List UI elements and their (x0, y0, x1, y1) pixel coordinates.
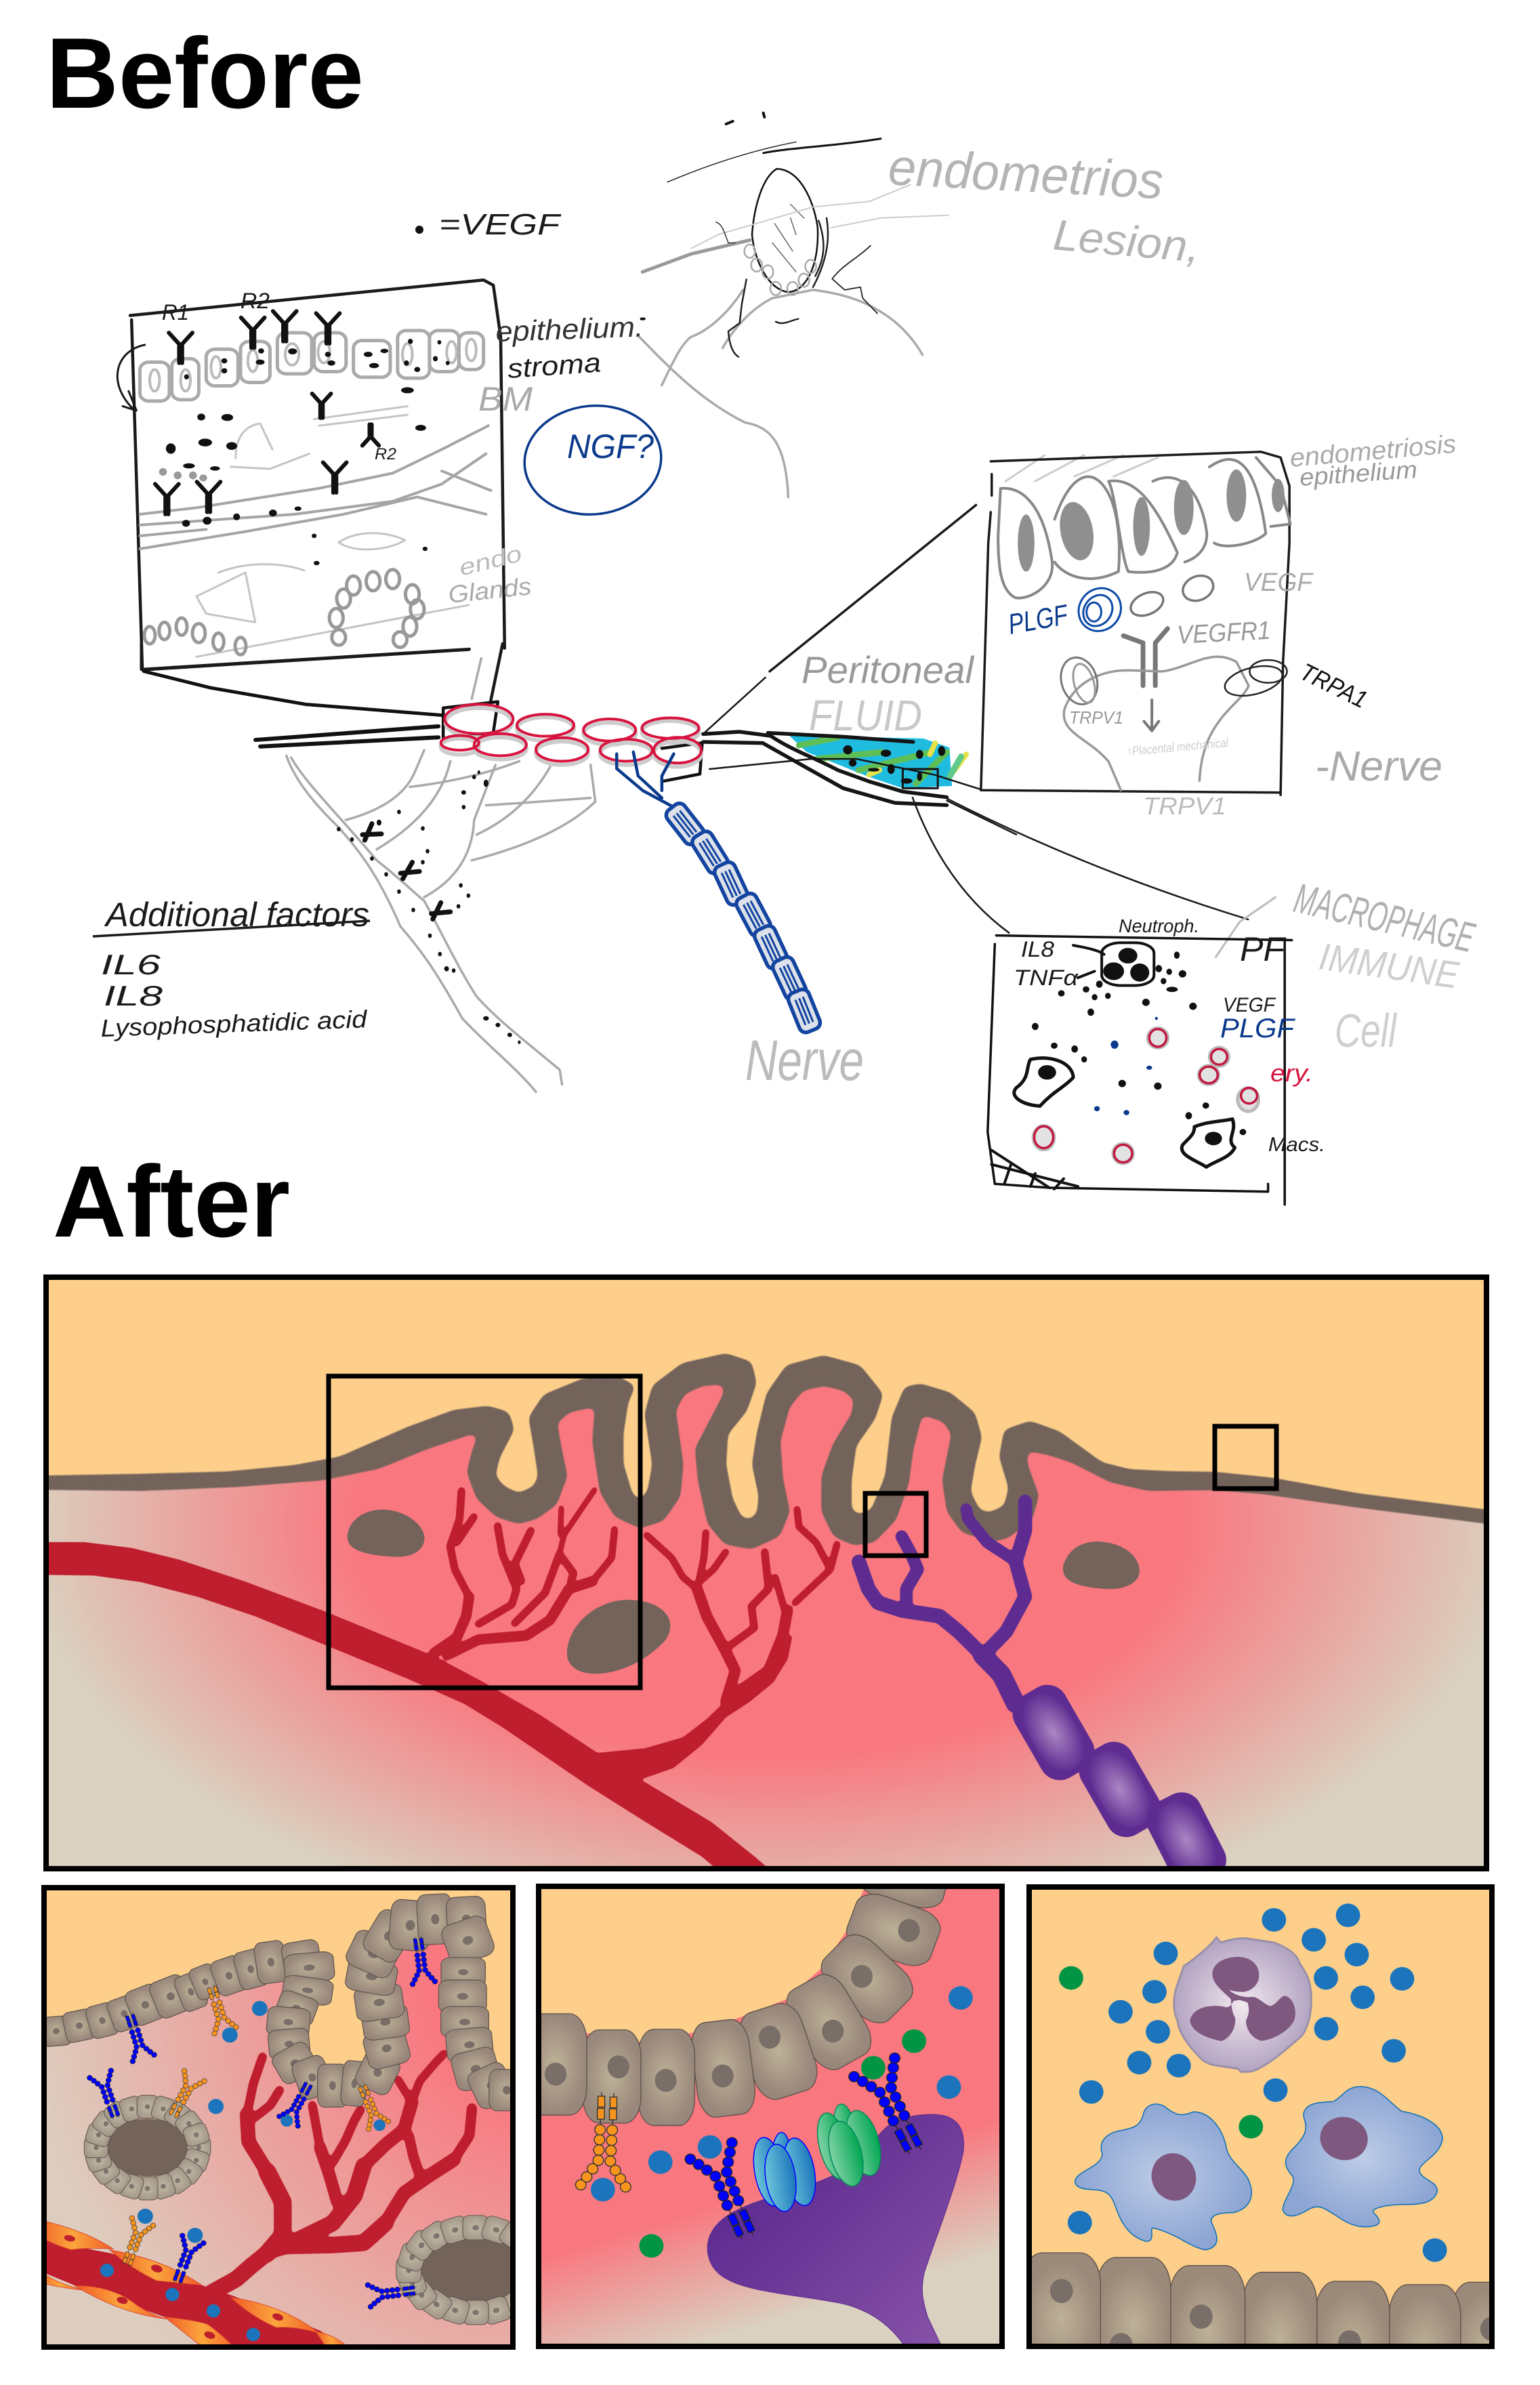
nerve ending (707, 2115, 963, 2353)
labels: macrophage immune cell: IMMUNE (1316, 934, 1462, 997)
inset labels: epithelium (1299, 455, 1418, 491)
panel frame (539, 1886, 1002, 2346)
blood vessel and capillary trees (8, 1490, 837, 1877)
inset labels: ery. (1270, 1059, 1313, 1087)
fluid background (534, 1882, 867, 2041)
fluid background (47, 1890, 510, 2069)
panel: peritoneal fluid immune cells (1022, 1884, 1523, 2385)
inset labels: -Nerve (1315, 743, 1442, 790)
macrophages (1075, 2086, 1442, 2249)
inset labels: R2 (375, 445, 396, 463)
inset labels (1014, 915, 1325, 1156)
zoom boxes (329, 1376, 1276, 1688)
inset drawing (770, 452, 1291, 795)
panel frame (44, 1888, 513, 2347)
sketch: endometriosis lesion overview (638, 113, 949, 497)
list: additional factors: IL8 (104, 980, 163, 1012)
inset labels: TRPV1 (1069, 707, 1123, 728)
inset labels: VEGF (1223, 994, 1276, 1016)
nerve with branches (859, 1501, 1025, 1703)
heading: Before: Before (46, 18, 364, 129)
list: additional factors: Additional factors (104, 896, 369, 934)
labels: macrophage immune cell: Cell (1335, 1004, 1398, 1057)
VEGF dots (100, 2001, 386, 2341)
inset labels: Glands (447, 572, 533, 608)
neutrophil (1174, 1937, 1311, 2072)
inset: endometriosis epithelium and nerve (770, 430, 1457, 820)
label: VEGF key: =VEGF (439, 208, 562, 241)
VEGF and PlGF dots (591, 1986, 973, 2258)
inset labels (162, 289, 644, 608)
nerve sketch in blue (663, 801, 822, 1035)
inset labels: ↑Placental mechanical (1127, 736, 1230, 758)
panel: main tissue overview (43, 1274, 1489, 1871)
inset labels: IL8 (1021, 937, 1054, 961)
main panel frame (46, 1277, 1486, 1869)
tissue gradient (534, 1882, 1010, 2353)
panel: epithelium, glands and capillaries detail (41, 1885, 516, 2350)
gland: lower right (396, 2215, 510, 2325)
ion channel: blue (749, 2132, 820, 2214)
inset labels: PLGF (1220, 1014, 1296, 1043)
sketch: tissue cross-section with lesion and vessels (142, 644, 1016, 1092)
peritoneal fluid region (703, 678, 1016, 835)
inset labels: R2 (241, 289, 270, 313)
inset labels: BM (478, 380, 533, 418)
inset labels: stroma (507, 348, 602, 384)
inset labels: TRPV1 (1143, 792, 1226, 820)
inset labels: R1 (162, 300, 189, 325)
inset labels: TRPA1 (1295, 657, 1372, 713)
heading: After: After (53, 1144, 290, 1258)
label: nerve: Nerve (745, 1029, 864, 1092)
blood vessel with endothelial cells (47, 2221, 346, 2344)
label: endometriosis lesion (887, 138, 1202, 272)
inset: endometrium epithelium and stroma (117, 280, 644, 670)
receptors (575, 2049, 944, 2247)
inset: peritoneal fluid immune cells (745, 795, 1325, 1205)
nerve beads (1012, 1684, 1226, 1866)
inset labels: endo (457, 541, 524, 581)
epithelium cell chain (34, 1893, 524, 2111)
gland: left (84, 2095, 211, 2201)
labels: peritoneal fluid: FLUID (809, 691, 922, 740)
inset labels: PF (1240, 930, 1287, 968)
list: additional factors: Lysophosphatidic acid (100, 1005, 368, 1042)
inset labels: VEGFR1 (1176, 617, 1271, 650)
label: endometriosis lesion: Lesion, (1052, 210, 1202, 272)
connecting lines and peritoneum (142, 644, 703, 1092)
inset labels: TNFα (1014, 966, 1079, 990)
inset labels: Macs. (1268, 1134, 1325, 1156)
epithelial cells (525, 1838, 954, 2125)
inset labels: endometriosis (1289, 430, 1457, 473)
peritoneal fluid background (49, 1280, 1484, 1519)
labels: macrophage immune cell (1290, 875, 1479, 1057)
capillary tree (211, 2054, 472, 2293)
inset labels: Neutroph. (1119, 915, 1199, 936)
panel: nerve ending detail (525, 1838, 1010, 2353)
stroma tissue gradient (49, 1385, 1484, 1866)
callout: NGF?: NGF? (567, 428, 654, 465)
label: endometriosis lesion: endometrios (887, 138, 1165, 210)
panel frame (1029, 1887, 1492, 2346)
VEGF receptors (86, 1934, 438, 2310)
sketch: before drawing (93, 113, 1479, 1205)
VEGF and PlGF dots (1059, 1903, 1447, 2262)
labels: peritoneal fluid (802, 648, 975, 740)
labels: peritoneal fluid: Peritoneal (802, 648, 975, 691)
list: additional factors: IL6 (101, 949, 161, 980)
list: additional factors (93, 896, 370, 1042)
tissue gradient (47, 1944, 510, 2344)
ion channel: green (812, 2102, 887, 2190)
callout: NGF? (519, 399, 667, 521)
inset labels: PLGF (1005, 598, 1071, 640)
inset drawing (745, 795, 1292, 1205)
inset labels (1005, 430, 1457, 820)
epithelium band (8, 1356, 1540, 1547)
inset labels: VEGF (1244, 568, 1314, 597)
glands in cross-section (348, 1510, 1140, 1674)
inset labels: epithelium. (495, 310, 644, 348)
inset drawing (117, 280, 505, 670)
label: VEGF key (415, 208, 562, 241)
epithelial cells at bottom (1022, 2253, 1523, 2385)
